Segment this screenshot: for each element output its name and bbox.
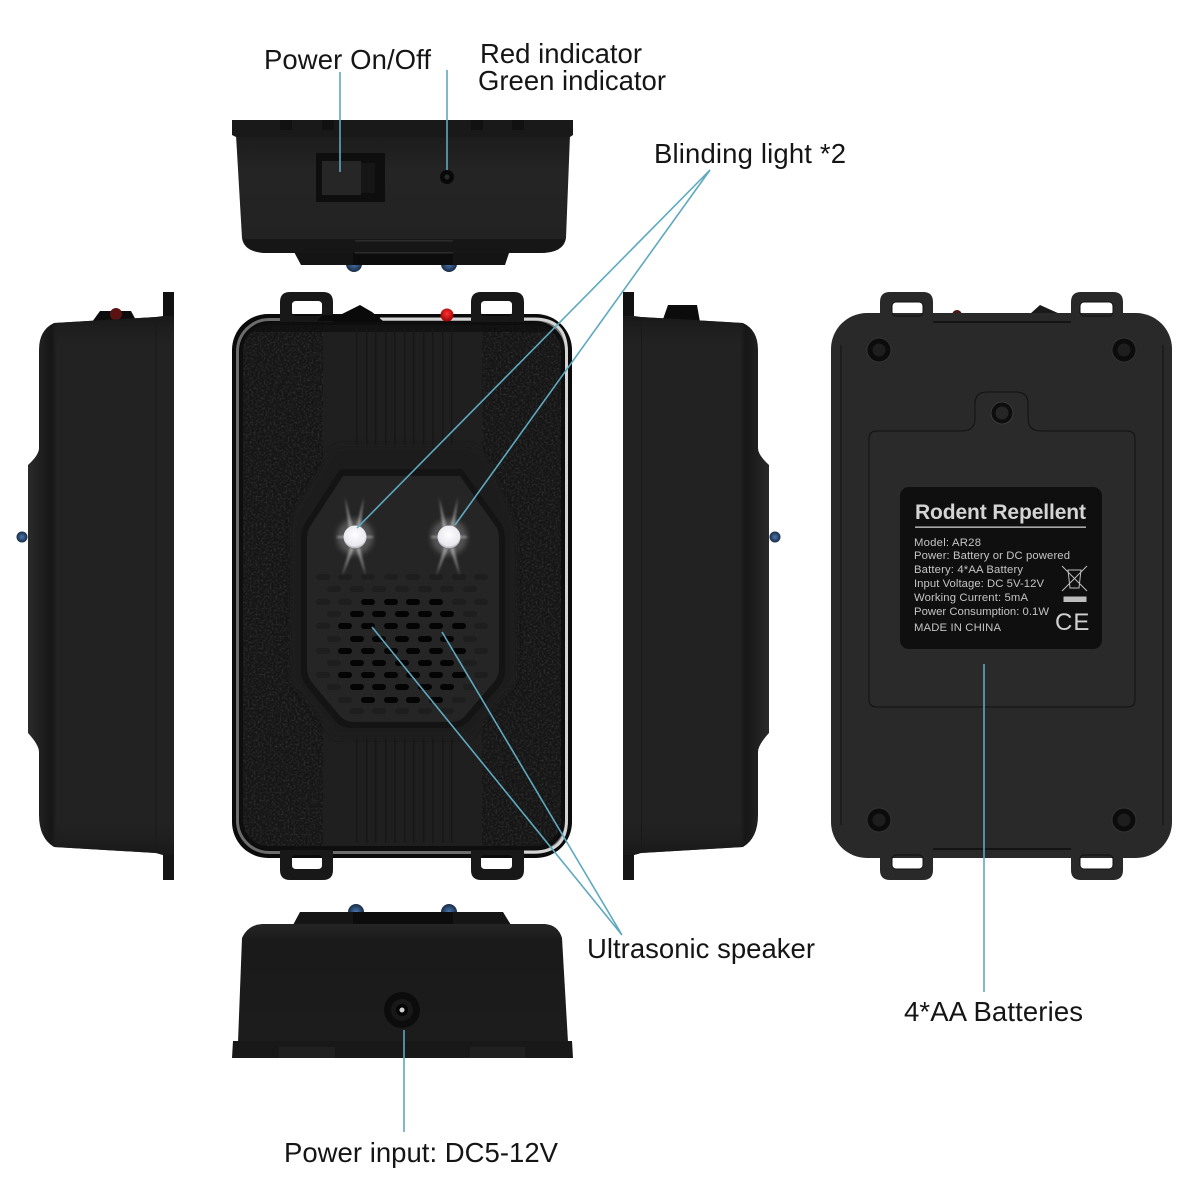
speaker pod: [290, 445, 517, 738]
bottom view of device: [232, 904, 573, 1058]
label specs: Power Consumption: 0.1W: [914, 606, 1049, 618]
red indicator: [440, 308, 454, 322]
leader line: indicator: [446, 70, 448, 170]
label specs: Battery: 4*AA Battery: [914, 564, 1023, 576]
icon: WEEE crossed bin: [1062, 566, 1087, 602]
rocker switch: [317, 305, 383, 321]
blinding light left: [337, 497, 373, 576]
front view of device: [232, 292, 572, 880]
leather side panels: [243, 325, 561, 846]
leader line: batteries: [983, 664, 985, 992]
leader line: power input: [403, 1030, 405, 1132]
blue LED tips: [346, 256, 457, 272]
icon: CE mark: CE: [1055, 609, 1090, 636]
blue LED tips: [348, 904, 457, 920]
mounting ears: [280, 292, 524, 880]
right side view: [623, 292, 780, 880]
label: Green indicator: Green indicator: [478, 65, 666, 96]
label title: Rodent Repellent: [915, 501, 1086, 524]
label: 4*AA Batteries: 4*AA Batteries: [904, 996, 1083, 1027]
label specs: Working Current: 5mA: [914, 592, 1028, 604]
shell with silver trim: [232, 314, 572, 858]
label specs: [914, 537, 1070, 634]
leader lines: blinding light: [357, 170, 710, 528]
corner screws: [867, 338, 1136, 832]
label: Power input: Power input: DC5-12V: [284, 1137, 559, 1168]
dark speaker holes: [338, 599, 466, 703]
leader lines: ultrasonic speaker: [372, 627, 622, 935]
left side view: [16, 292, 174, 880]
label specs: Input Voltage: DC 5V-12V: [914, 578, 1044, 590]
centre ribs: [356, 328, 452, 843]
power switch: [316, 153, 385, 202]
label: Power On/Off: Power On/Off: [264, 44, 431, 75]
battery cover: [869, 392, 1135, 707]
indicator light: [440, 170, 454, 184]
back view of device: [831, 292, 1172, 880]
dim speaker slots: [316, 574, 488, 714]
blinding light right: [431, 497, 467, 576]
label: Red indicator: Red indicator: [480, 38, 642, 69]
cover screw: [991, 402, 1013, 424]
label specs: Power: Battery or DC powered: [914, 550, 1070, 562]
leader line: power switch: [339, 72, 341, 172]
label: Blinding light: Blinding light *2: [654, 138, 846, 169]
top view of device: [232, 120, 573, 272]
label specs: Model: AR28: [914, 537, 981, 549]
label specs: MADE IN CHINA: [914, 622, 1001, 634]
mounting ears: [880, 292, 1123, 880]
specification label: [900, 487, 1102, 649]
DC power jack: [384, 992, 420, 1028]
vent ribs: [355, 240, 453, 254]
label: Ultrasonic speaker: Ultrasonic speaker: [587, 933, 815, 964]
